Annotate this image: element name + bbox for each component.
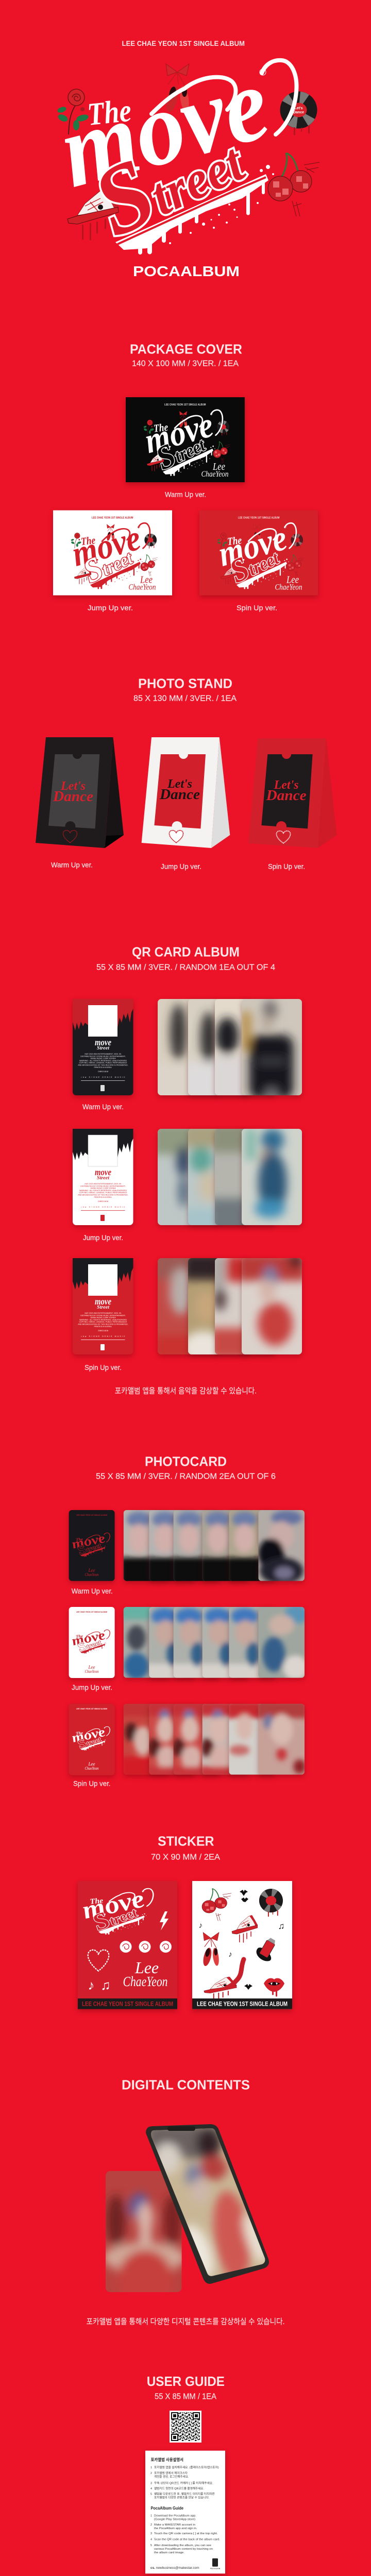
cover: spin up: Lee <box>286 574 299 585</box>
qr card back: spin up: AND BROADCASTING OF THIS RECORD IS PROHIBITED. <box>78 1323 128 1325</box>
stand: jump up: Let's <box>167 777 192 791</box>
blurred photo 2 <box>183 999 248 1103</box>
qr card back: warm up: Street <box>97 1045 110 1050</box>
sticker sheet: red: Lee <box>134 1958 159 1977</box>
phone and card illustration <box>103 2123 273 2310</box>
blurred photo 3 <box>210 999 275 1103</box>
blurred photo 1 <box>121 1701 170 1779</box>
blurred photo 2 <box>183 1124 248 1229</box>
blurred photo 4 <box>199 1607 248 1684</box>
label: warm up: Warm Up ver. <box>51 860 93 869</box>
qr card back: warm up: ℗&© 2023 WM ENTERTAINMENT. 2023. 09. <box>85 1053 122 1055</box>
photocard front: warm up: move <box>70 1532 107 1552</box>
photocards: warm up <box>121 1510 305 1588</box>
panel: hero cover <box>48 39 319 279</box>
blurred photo 3 <box>212 1128 276 1230</box>
qr card back: jump up: ℗&© 2023 WM ENTERTAINMENT. 2023. 09. <box>85 1183 122 1185</box>
label: warm up: Warm Up ver. <box>72 1587 113 1595</box>
guide card: Download the PocaAlbum app. <box>154 2515 197 2518</box>
guide card: 2 <box>150 2472 152 2475</box>
logo: The move Street: Street <box>78 97 258 258</box>
heading: DIGITAL CONTENTS <box>122 2077 250 2092</box>
panel: sticker <box>78 1833 292 2009</box>
qr card back: jump up: Street <box>97 1175 110 1180</box>
blurred photo 1 <box>121 1604 170 1680</box>
sticker sheet: red: ♫ <box>100 1977 111 1993</box>
panel: photocard <box>69 1453 309 1788</box>
sticker sheet: white: ♪ <box>228 1950 232 1959</box>
sticker sheet: white <box>192 1881 292 2009</box>
photocard front: jump up: Lee <box>88 1665 95 1670</box>
stand: spin up: Let's <box>274 778 299 792</box>
label: jump up: Jump Up ver. <box>72 1683 112 1691</box>
stand: warm up <box>36 737 124 848</box>
photocards: jump up <box>121 1604 309 1684</box>
guide card: 앨범을 다운로드한 후, 앨범카드 이미지를 터치하면 <box>154 2492 214 2496</box>
blurred photo 5 <box>226 1607 275 1684</box>
guide card: 계정을 생성, 로그인해주세요. <box>154 2475 189 2479</box>
photo cards: warm up <box>153 999 302 1105</box>
label: spin up: Spin Up ver. <box>73 1780 110 1788</box>
guide card: the PocaAlbum app and sign in. <box>154 2527 197 2530</box>
heading: PHOTOCARD <box>145 1453 227 1469</box>
guide card: PocaAlbum Guide <box>150 2506 184 2511</box>
guide card: After downloading the album, you can see <box>154 2544 211 2547</box>
photocard front: spin up: LEE CHAE YEON 1ST SINGLE ALBUM <box>76 1708 107 1710</box>
sticker sheet: red: ♪ <box>88 1977 95 1993</box>
size spec: 70 X 90 MM / 2EA <box>151 1853 220 1862</box>
cover: warm up: LEE CHAE YEON 1ST SINGLE ALBUM <box>164 403 206 406</box>
qr card back: spin up: DISTRIBUTED BY STONE MUSIC ENTERTAINMENT, <box>80 1314 126 1316</box>
blurred photo 4 <box>199 1701 251 1779</box>
size spec: 55 X 85 MM / 3VER. / RANDOM 2EA OUT OF 6 <box>96 1472 276 1481</box>
size spec: 55 X 85 MM / 3VER. / RANDOM 1EA OUT OF 4 <box>96 963 275 972</box>
qr card back: jump up: PRINTED IN KOREA. <box>94 1196 112 1198</box>
guide card: POCAALBUM <box>210 2568 221 2570</box>
photocards: spin up <box>121 1701 308 1779</box>
label: spin up: Spin Up ver. <box>268 862 305 870</box>
guide card: 포카앨범의 다양한 콘텐츠를 만날 수 있습니다. <box>154 2496 210 2500</box>
photocard front: jump up: Street <box>74 1634 104 1654</box>
guide card: 5 <box>150 2544 152 2547</box>
photocard front: spin up: The <box>76 1731 83 1736</box>
guide card: the album card image. <box>154 2551 185 2554</box>
blurred photo 1 <box>153 1124 218 1225</box>
blurred photo 5 <box>226 1701 275 1775</box>
qr card back: warm up: COPYING, HIRING, LENDING, PUBLIC PERFORMANCE <box>79 1062 127 1064</box>
label: spin up: Spin Up ver. <box>85 1363 122 1371</box>
guide card: 3 <box>150 2482 152 2485</box>
sticker sheet: white: ♫ <box>278 1921 284 1931</box>
sticker sheet: red: The <box>89 1896 104 1906</box>
cover: spin up <box>199 510 318 596</box>
qr card back: spin up: COPYING, HIRING, LENDING, PUBLIC PERFORMANCE <box>79 1321 127 1323</box>
panel: user guide <box>145 2374 225 2573</box>
photocard front: jump up: ChaeYeon <box>85 1669 99 1674</box>
stand: spin up <box>248 738 336 848</box>
guide card: 2 <box>150 2523 152 2527</box>
blurred photo 1 <box>153 1253 218 1361</box>
cover: warm up: move <box>141 404 217 461</box>
blurred photo 5 <box>226 1510 275 1588</box>
panel: photo stand <box>36 675 336 870</box>
stand: spin up: Dance <box>266 788 307 804</box>
icon: lips <box>264 1978 284 1997</box>
qr card back: jump up: COPYING, HIRING, LENDING, PUBLIC PERFORMANCE <box>79 1192 127 1194</box>
guide card: 4 <box>150 2538 152 2541</box>
label: spin up: Spin Up ver. <box>237 603 277 612</box>
infographic page <box>36 41 337 2576</box>
guide card <box>145 2451 225 2573</box>
logo: The move Street: move <box>48 44 280 210</box>
blurred photo 2 <box>146 1607 195 1684</box>
guide card: 앨범카드 뒷면의 QR코드를 촬영해주세요. <box>154 2486 204 2490</box>
size spec: 85 X 130 MM / 3VER. / 1EA <box>133 694 237 703</box>
qr card back: warm up: PRINTED IN KOREA. <box>94 1066 112 1069</box>
qr card back: warm up: move <box>95 1037 111 1047</box>
heading: PACKAGE COVER <box>130 342 242 357</box>
logo: The move Street: Dance <box>293 111 304 114</box>
panel: package cover <box>53 342 318 612</box>
heading: PHOTO STAND <box>138 675 232 691</box>
sticker sheet: red: Street <box>87 1897 142 1936</box>
photocard front: spin up <box>69 1704 115 1775</box>
sticker sheet: red: move <box>78 1885 148 1924</box>
cover: warm up: Street <box>150 422 210 477</box>
qr card back: jump up: WARNING : ALL RIGHTS RESERVED. UNAUTHORIZED <box>79 1190 127 1192</box>
qr card back: jump up <box>73 1129 133 1225</box>
cover: warm up <box>126 397 245 482</box>
qr card back: spin up: GENIE MUSIC CORP. KOREA <box>90 1317 116 1319</box>
icon: spray can <box>254 1935 280 1963</box>
cover: warm up: Lee <box>212 461 225 472</box>
qr card back: jump up: move <box>95 1167 111 1177</box>
cover: spin up: Street <box>224 535 283 590</box>
photocard front: spin up: Street <box>74 1731 104 1751</box>
size spec: 140 X 100 MM / 3VER. / 1EA <box>132 360 239 368</box>
cover: spin up: move <box>214 517 291 574</box>
photocard front: warm up <box>69 1510 115 1581</box>
blurred photo 4 <box>242 1129 302 1225</box>
blurred photo 6 <box>258 1510 305 1584</box>
cover: jump up: move <box>68 517 144 574</box>
blurred photo 2 <box>146 1701 197 1779</box>
sticker sheet: red <box>78 1881 177 2009</box>
blurred photo 4 <box>242 999 302 1099</box>
qr card back: warm up: WARNING : ALL RIGHTS RESERVED. UNAUTHORIZED <box>79 1060 127 1062</box>
photocard front: warm up: The <box>76 1537 83 1542</box>
photocard front: spin up: move <box>70 1725 107 1745</box>
guide card: cs. newbusiness@makestar.com <box>150 2566 199 2570</box>
qr card back: jump up: CMBC11818 <box>98 1200 108 1202</box>
qr card back: warm up: rbw S+ONE GENIE MUSIC <box>81 1076 125 1078</box>
blurred photo 1 <box>121 1510 170 1588</box>
blurred photo 6 <box>258 1605 309 1680</box>
guide card: 포카앨범 사용설명서 <box>150 2457 183 2462</box>
photocard front: jump up <box>69 1607 115 1678</box>
guide card: Scan the QR code at the back of the album card. <box>154 2538 220 2541</box>
qr card back: jump up: GENIE MUSIC CORP. KOREA <box>90 1188 116 1190</box>
photocard front: warm up: LEE CHAE YEON 1ST SINGLE ALBUM <box>76 1514 107 1516</box>
album line: LEE CHAE YEON 1ST SINGLE ALBUM <box>122 39 245 47</box>
panel: digital contents <box>87 2077 284 2326</box>
label: warm up: Warm Up ver. <box>165 490 206 498</box>
guide card: 포카앨범 앱에서 메이크스타 <box>154 2471 188 2475</box>
blurred photo 2 <box>146 1510 195 1588</box>
stand: warm up: Dance <box>53 789 93 805</box>
heading: STICKER <box>158 1833 214 1849</box>
sticker sheet: red: LEE CHAE YEON 1ST SINGLE ALBUM <box>82 2000 173 2007</box>
qr card back: spin up: Street <box>97 1304 110 1310</box>
label: jump up: Jump Up ver. <box>88 603 133 612</box>
guide card: (Google Play Store/App store) <box>154 2518 195 2521</box>
heading: QR CARD ALBUM <box>132 944 240 959</box>
cover: jump up: Lee <box>140 574 153 585</box>
sticker sheet: white: ♪ <box>199 1921 203 1930</box>
qr card back: spin up <box>73 1258 133 1354</box>
photocard front: jump up: LEE CHAE YEON 1ST SINGLE ALBUM <box>76 1611 107 1613</box>
blurred photo 4 <box>237 1253 306 1354</box>
blurred photo 3 <box>171 1607 220 1684</box>
qr card back: spin up: WARNING : ALL RIGHTS RESERVED. UNAUTHORIZED <box>79 1319 127 1321</box>
note: listen through app: 포카앨범 앱을 통해서 음악을 감상할 수 있습니다. <box>115 1387 257 1396</box>
guide card: various PocaAlbum content by touching on <box>154 2548 213 2551</box>
qr card back: warm up: GENIE MUSIC CORP. KOREA <box>90 1058 116 1060</box>
qr card back: spin up: move <box>95 1296 111 1307</box>
cover: jump up <box>53 510 172 596</box>
size spec: 55 X 85 MM / 1EA <box>155 2393 216 2401</box>
logo: The move Street: Let's <box>294 107 303 110</box>
guide card: 포카앨범 앱을 설치해주세요. (플레이스토어/앱스토어) <box>154 2465 219 2469</box>
photocard front: jump up: The <box>76 1634 83 1639</box>
pocaalbum title: POCAALBUM <box>133 263 240 279</box>
cover: jump up: Street <box>78 535 137 590</box>
photo cards: jump up <box>153 1124 302 1234</box>
guide card: 1 <box>150 2515 152 2518</box>
cover: spin up: LEE CHAE YEON 1ST SINGLE ALBUM <box>238 516 279 519</box>
qr card back: jump up: DISTRIBUTED BY STONE MUSIC ENTERTAINMENT, <box>80 1185 126 1187</box>
blurred photo 3 <box>210 1255 275 1359</box>
guide card: Touch the QR code camera [ ] at the top right. <box>154 2532 218 2535</box>
cover: jump up: ChaeYeon <box>129 583 156 591</box>
guide card: 3 <box>150 2532 152 2535</box>
stand: warm up: Let's <box>60 779 86 793</box>
label: jump up: Jump Up ver. <box>83 1233 123 1242</box>
blurred photo 3 <box>171 1510 220 1588</box>
qr card back: spin up: CMBC11818 <box>98 1330 108 1332</box>
qr code <box>170 2411 201 2443</box>
qr card back: jump up: AND BROADCASTING OF THIS RECORD IS PROHIBITED. <box>78 1194 128 1196</box>
qr card back: warm up <box>73 999 133 1095</box>
photocard front: spin up: Lee <box>88 1761 95 1767</box>
photocard front: spin up: ChaeYeon <box>85 1766 99 1771</box>
qr card back: jump up: rbw S+ONE GENIE MUSIC <box>81 1206 125 1208</box>
qr card back: warm up: CMBC11818 <box>98 1071 108 1073</box>
sticker sheet: white: LEE CHAE YEON 1ST SINGLE ALBUM <box>197 2000 288 2007</box>
photocard front: warm up: Street <box>74 1537 104 1557</box>
cover: spin up: ChaeYeon <box>275 583 302 591</box>
stand: jump up: Dance <box>159 787 200 803</box>
sticker sheet: red: ChaeYeon <box>123 1974 168 1989</box>
cover: jump up: LEE CHAE YEON 1ST SINGLE ALBUM <box>92 516 133 519</box>
cover: jump up: The <box>80 534 96 548</box>
photocard front: warm up: Lee <box>88 1568 95 1573</box>
label: warm up: Warm Up ver. <box>82 1103 124 1111</box>
blurred photo 2 <box>185 1258 248 1359</box>
blurred photo 3 <box>171 1701 222 1779</box>
photocard front: warm up: ChaeYeon <box>85 1572 99 1577</box>
note: digital contents: 포카앨범 앱을 통해서 다양한 디지털 콘텐츠를 감상하실 수 있습니다. <box>87 2317 284 2326</box>
qr card back: spin up: ℗&© 2023 WM ENTERTAINMENT. 2023. 09. <box>85 1312 122 1314</box>
guide card: 5 <box>150 2493 152 2496</box>
photocard front: jump up: move <box>70 1629 107 1649</box>
qr card back: spin up: PRINTED IN KOREA. <box>94 1326 112 1328</box>
cover: warm up: The <box>153 421 168 435</box>
panel: qr card album <box>73 944 306 1396</box>
blurred photo 6 <box>255 1701 308 1775</box>
qr card back: warm up: AND BROADCASTING OF THIS RECORD IS PROHIBITED. <box>78 1064 128 1066</box>
label: jump up: Jump Up ver. <box>161 862 201 870</box>
logo: The move Street: The <box>86 93 133 132</box>
qr card back: warm up: DISTRIBUTED BY STONE MUSIC ENTERTAINMENT, <box>80 1055 126 1057</box>
blurred photo 1 <box>153 999 218 1105</box>
guide card: 4 <box>150 2487 152 2490</box>
blurred photo 4 <box>199 1510 248 1588</box>
guide card: 우측 상단의 QR코드 카메라 [ ] 를 터치해주세요. <box>154 2481 213 2485</box>
guide card: 1 <box>150 2466 152 2469</box>
guide card: Make a MAKESTAR account in <box>154 2523 195 2527</box>
cover: warm up: ChaeYeon <box>201 470 229 479</box>
stand: jump up <box>142 737 230 848</box>
cover: spin up: The <box>227 534 242 548</box>
heading: USER GUIDE <box>147 2374 225 2389</box>
photo cards: spin up <box>155 1256 305 1360</box>
qr card back: spin up: rbw S+ONE GENIE MUSIC <box>81 1335 125 1337</box>
